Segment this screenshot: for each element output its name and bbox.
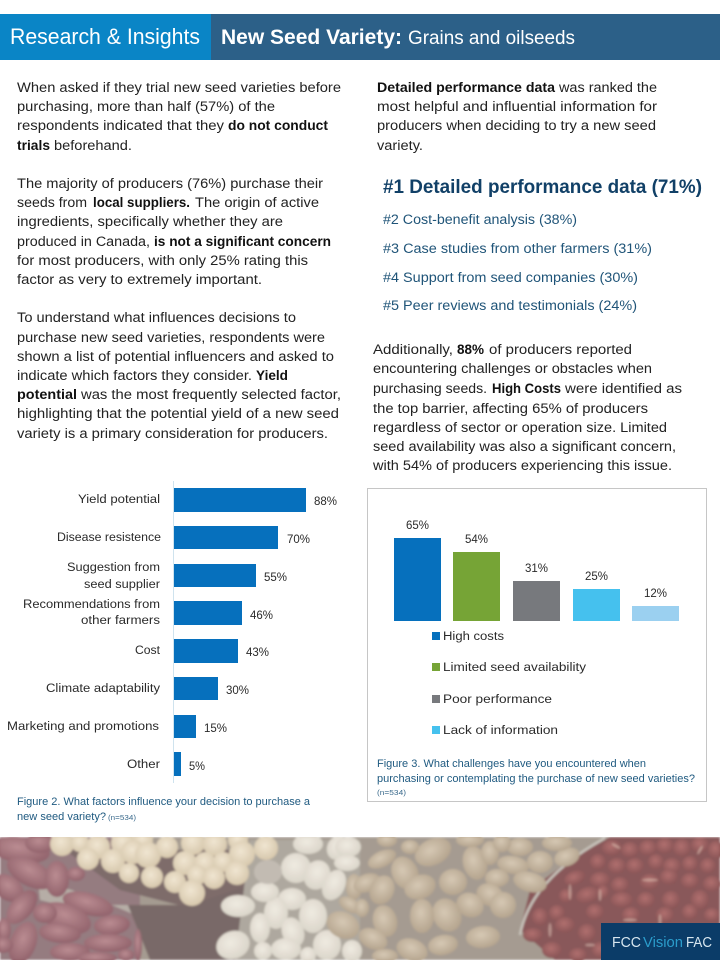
bar: Recommendations from other farmers 46% bbox=[23, 597, 273, 627]
text block: trial findings: beforehand. bbox=[54, 138, 132, 153]
logo: FCC Vision FAC: Vision bbox=[643, 935, 683, 951]
caption: figure 3 bbox=[377, 758, 695, 797]
text block: purchase influencers: purchase new seed varieties, respondents were bbox=[17, 330, 325, 345]
logo: FCC Vision FAC: FCC bbox=[612, 935, 641, 951]
text block: purchase influencers: was the most frequently selected factor, bbox=[80, 387, 341, 402]
text block: purchase influencers: potential bbox=[17, 387, 77, 402]
bar: Recommendations from other farmers 46%: Recommendations from bbox=[23, 597, 160, 611]
header title: New Seed Variety bbox=[211, 14, 720, 60]
bar: Marketing and promotions 15% bbox=[7, 715, 227, 738]
bar: Poor performance 31% bbox=[513, 563, 560, 621]
caption: figure 2: Figure 2. What factors influence your decision to purchase a bbox=[17, 796, 311, 808]
footer photo: assorted beans bbox=[0, 830, 720, 960]
bar: Climate adaptability 30%: Climate adaptability bbox=[46, 681, 161, 695]
header tab: Research & Insights bbox=[0, 14, 211, 60]
text block: purchase influencers bbox=[17, 310, 341, 441]
bar: Marketing and promotions 15%: Marketing and promotions bbox=[7, 719, 159, 733]
text block: purchase barriers: were identified as bbox=[564, 381, 682, 396]
text block: trial findings: When asked if they trial new seed varieties before bbox=[17, 80, 341, 95]
panel: figure 3 challenges chart bbox=[368, 488, 706, 802]
caption: figure 3: Figure 3. What challenges have you encountered when bbox=[377, 758, 646, 770]
bar: Lack of information 25% bbox=[573, 571, 620, 621]
text block: local suppliers bbox=[17, 176, 331, 287]
text block: purchase influencers: variety is a primary consideration for producers. bbox=[17, 426, 328, 441]
logo: FCC Vision FAC bbox=[601, 923, 720, 960]
bar: High costs 65% bbox=[394, 520, 441, 621]
bar: Lack of information 25%: 25% bbox=[585, 571, 608, 583]
top ranked item: #1 Detailed performance data (71%) bbox=[383, 176, 702, 198]
adzuki beans bbox=[523, 837, 720, 960]
text block: purchase barriers: Additionally, bbox=[373, 342, 453, 357]
text block: purchase barriers: High Costs bbox=[492, 381, 561, 396]
bar: Suggestion from seed supplier 55% bbox=[67, 560, 287, 591]
text block: local suppliers: factor as very to extremely important. bbox=[17, 272, 262, 287]
bar: Recommendations from other farmers 46%: other farmers bbox=[81, 613, 160, 627]
kidney beans bbox=[0, 833, 142, 960]
text block: trial findings: do not conduct bbox=[228, 118, 329, 133]
bar: Yield potential 88%: 88% bbox=[314, 496, 337, 508]
header title: New Seed Variety: New Seed Variety: bbox=[221, 26, 402, 49]
text block: purchase barriers: purchasing seeds. bbox=[373, 381, 487, 396]
header banner bbox=[0, 14, 720, 60]
text block: local suppliers: ingredients, specifically whether they are bbox=[17, 214, 283, 229]
rank 2: #2 Cost-benefit analysis (38%) bbox=[383, 212, 577, 227]
text block: purchase influencers: Yield bbox=[256, 368, 288, 383]
bar: Disease resistence 70% bbox=[57, 526, 310, 549]
text block: local suppliers: is not a significant concern bbox=[154, 234, 331, 249]
text block: local suppliers: The majority of producers (76%) purchase their bbox=[17, 176, 324, 191]
caption: figure 3: (n=534) bbox=[377, 788, 407, 797]
bar: Marketing and promotions 15%: 15% bbox=[204, 723, 227, 735]
text block: purchase barriers bbox=[372, 342, 682, 473]
legend bbox=[432, 629, 587, 737]
legend: Lack of information bbox=[443, 723, 558, 737]
bar: Climate adaptability 30% bbox=[46, 677, 249, 700]
text block: purchase influencers: shown a list of potential influencers and asked to bbox=[17, 349, 334, 364]
text block: purchase barriers: 88% bbox=[457, 342, 484, 357]
text block: detailed performance data intro: most helpful and influential information for bbox=[377, 99, 658, 114]
bar: Yield potential 88% bbox=[78, 488, 337, 512]
header tab: Research & Insights: Research & Insights bbox=[10, 24, 200, 49]
text block: purchase influencers: indicate which factors they consider. bbox=[17, 368, 252, 383]
text block: trial findings: trials bbox=[17, 138, 50, 153]
text block: detailed performance data intro: Detailed performance data bbox=[377, 80, 556, 95]
text block: local suppliers: for most producers, with only 25% rating this bbox=[17, 253, 308, 268]
caption: figure 2: new seed variety? bbox=[17, 811, 106, 823]
bar: Recommendations from other farmers 46%: 46% bbox=[250, 610, 273, 622]
bar: High costs 65%: 65% bbox=[406, 520, 429, 532]
ranked list of helpful information bbox=[383, 176, 702, 313]
bar: Cost 43% bbox=[135, 639, 269, 663]
text block: detailed performance data intro: was ranked the bbox=[558, 80, 657, 95]
text block: purchase barriers: with 54% of producers experiencing this issue. bbox=[372, 458, 672, 473]
rank 4: #4 Support from seed companies (30%) bbox=[383, 270, 638, 285]
legend: Poor performance bbox=[443, 692, 552, 706]
bar: Disease resistence 70%: Disease resistence bbox=[57, 530, 161, 544]
text block: purchase barriers: of producers reported bbox=[489, 342, 632, 357]
bar: Cost 43%: Cost bbox=[135, 643, 161, 657]
bar: unlabelled category 12%: 12% bbox=[644, 588, 667, 600]
bar: Cost 43%: 43% bbox=[246, 647, 269, 659]
text block: purchase influencers: To understand what influences decisions to bbox=[17, 310, 296, 325]
bar: Other 5%: 5% bbox=[189, 761, 205, 773]
rank 5: #5 Peer reviews and testimonials (24%) bbox=[383, 298, 637, 313]
bar: Limited seed availability 54%: 54% bbox=[465, 534, 488, 546]
bar: Poor performance 31%: 31% bbox=[525, 563, 548, 575]
bar: Suggestion from seed supplier 55%: Suggestion from bbox=[67, 560, 160, 574]
text block: purchase barriers: encountering challenges or obstacles when bbox=[373, 361, 652, 376]
text block: trial findings: purchasing, more than half (57%) of the bbox=[17, 99, 275, 114]
text block: local suppliers: produced in Canada, bbox=[17, 234, 150, 249]
bar: Climate adaptability 30%: 30% bbox=[226, 685, 249, 697]
caption: figure 3: purchasing or contemplating the purchase of new seed varieties? bbox=[377, 773, 695, 785]
text block: local suppliers: local suppliers. bbox=[93, 195, 190, 210]
bar: Yield potential 88%: Yield potential bbox=[78, 492, 160, 506]
text block: detailed performance data intro bbox=[377, 80, 658, 153]
bar: Disease resistence 70%: 70% bbox=[287, 534, 310, 546]
white beans bbox=[212, 833, 362, 960]
caption: figure 2 bbox=[17, 796, 311, 823]
text block: local suppliers: The origin of active bbox=[195, 195, 319, 210]
bean highlights bbox=[548, 842, 704, 946]
header title: New Seed Variety: Grains and oilseeds bbox=[408, 28, 575, 49]
text block: detailed performance data intro: variety. bbox=[377, 138, 423, 153]
text block: detailed performance data intro: producers when deciding to try a new seed bbox=[377, 118, 656, 133]
bar: Other 5% bbox=[127, 752, 205, 776]
bar: Limited seed availability 54% bbox=[453, 534, 500, 621]
logo: FCC Vision FAC: FAC bbox=[686, 935, 712, 951]
pinto beans bbox=[322, 832, 582, 960]
chickpeas bbox=[50, 830, 278, 906]
caption: figure 2: (n=534) bbox=[108, 813, 137, 822]
text block: purchase influencers: highlighting that the potential yield of a new seed bbox=[17, 406, 339, 421]
bar: Suggestion from seed supplier 55%: 55% bbox=[264, 572, 287, 584]
text block: trial findings bbox=[17, 80, 341, 153]
bar: Suggestion from seed supplier 55%: seed supplier bbox=[84, 577, 160, 591]
bar chart: factors influencing purchase bbox=[7, 481, 337, 783]
bar: unlabelled category 12% bbox=[632, 588, 679, 621]
legend: High costs bbox=[443, 629, 504, 643]
text block: purchase barriers: seed availability was also a significant concern, bbox=[373, 439, 676, 454]
text block: purchase barriers: the top barrier, affecting 65% of producers bbox=[373, 401, 648, 416]
rank 3: #3 Case studies from other farmers (31%) bbox=[383, 241, 652, 256]
bar: Other 5%: Other bbox=[127, 757, 160, 771]
text block: trial findings: respondents indicated that they bbox=[17, 118, 224, 133]
text block: purchase barriers: regardless of sector or operation size. Limited bbox=[373, 420, 667, 435]
legend: Limited seed availability bbox=[443, 660, 587, 674]
text block: local suppliers: seeds from bbox=[17, 195, 87, 210]
